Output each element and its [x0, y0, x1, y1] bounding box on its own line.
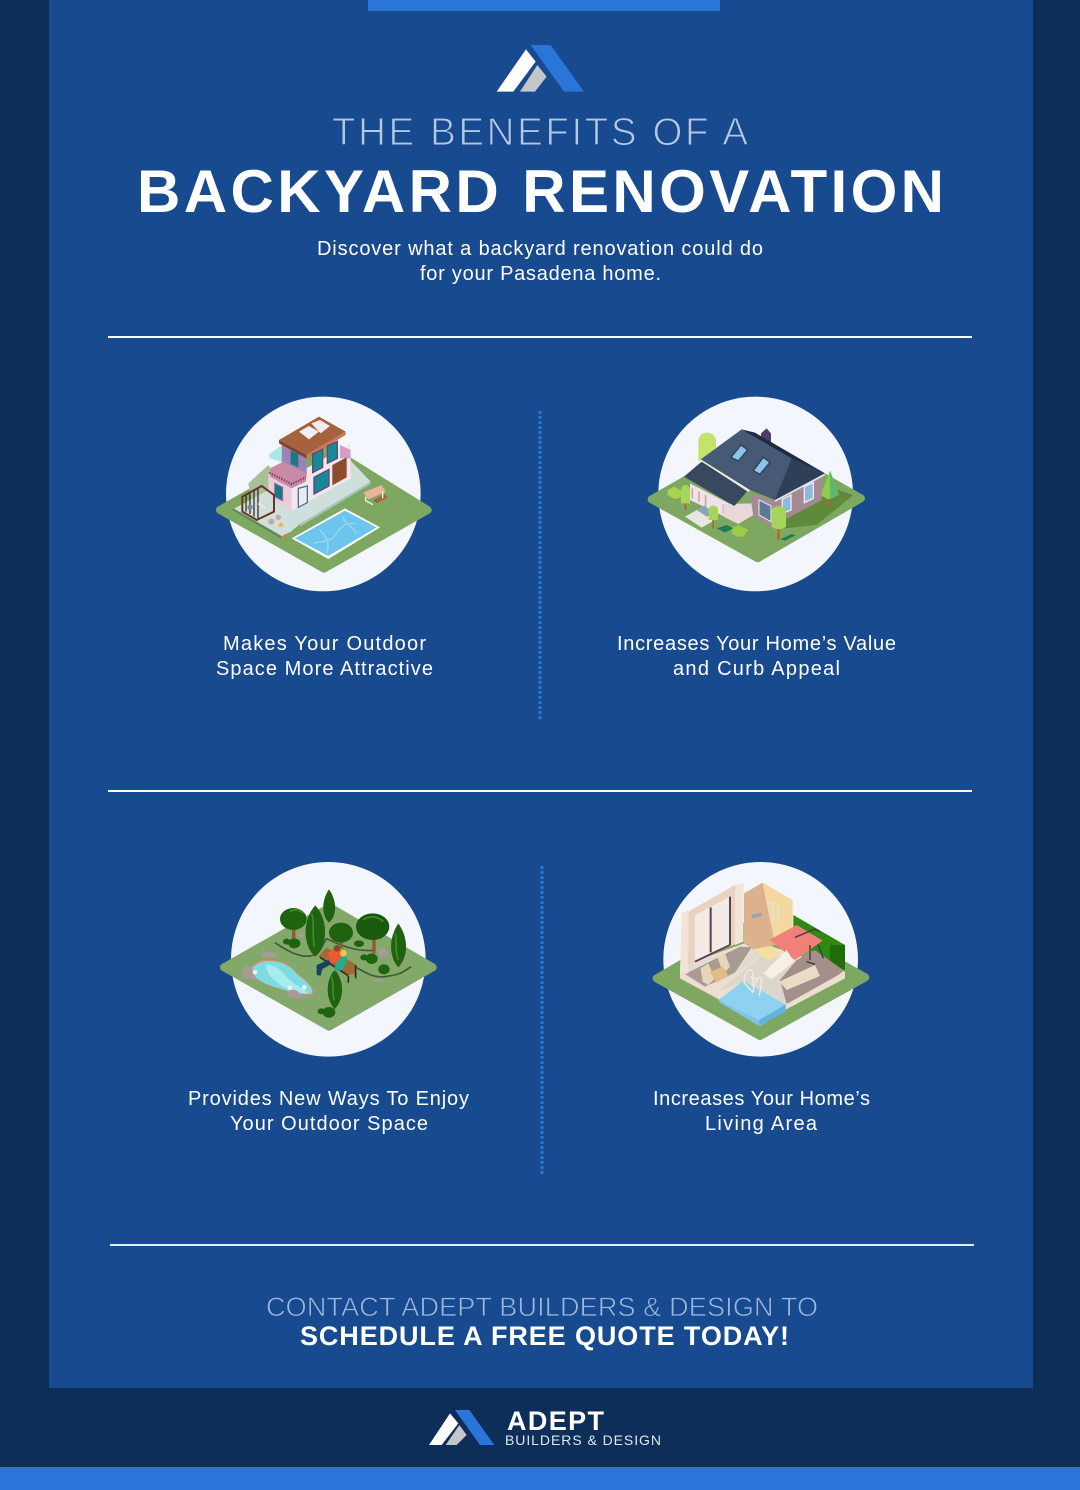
icon: garden with pond — [224, 862, 433, 1057]
subtitle: Discover what a backyard renovation could do — [317, 238, 763, 260]
icon: outdoor living room cutaway — [657, 862, 865, 1057]
label: new ways to enjoy — [188, 1088, 469, 1135]
label: new ways to enjoy: Provides New Ways To Enjoy — [188, 1088, 469, 1110]
footer logo — [429, 1406, 661, 1448]
footer logo: BUILDERS & DESIGN — [505, 1432, 661, 1448]
footer logo: ADEPT — [507, 1406, 604, 1436]
label: attractive space — [216, 633, 433, 680]
subtitle: for your Pasadena home. — [420, 263, 661, 285]
call to action line two: SCHEDULE A FREE QUOTE TODAY! — [300, 1321, 789, 1351]
label: living area: Living Area — [705, 1113, 818, 1135]
label: living area: Increases Your Home’s — [653, 1088, 870, 1110]
icon: modern house with pool — [220, 397, 428, 591]
title line one: THE BENEFITS OF A — [332, 111, 748, 154]
label: new ways to enjoy: Your Outdoor Space — [230, 1113, 428, 1135]
bottom accent bar — [0, 1467, 1080, 1490]
label: home value — [617, 633, 896, 680]
label: home value: and Curb Appeal — [673, 658, 840, 680]
subtitle — [317, 238, 763, 285]
label: attractive space: Space More Attractive — [216, 658, 433, 680]
icon: top logo — [497, 45, 584, 92]
label: home value: Increases Your Home’s Value — [617, 633, 896, 655]
label: living area — [653, 1088, 870, 1135]
icon: suburban house — [652, 397, 861, 591]
label: attractive space: Makes Your Outdoor — [223, 633, 426, 655]
call to action line one: CONTACT ADEPT BUILDERS & DESIGN TO — [266, 1292, 818, 1322]
title line two: BACKYARD RENOVATION — [137, 158, 944, 225]
top accent bar — [368, 0, 720, 11]
